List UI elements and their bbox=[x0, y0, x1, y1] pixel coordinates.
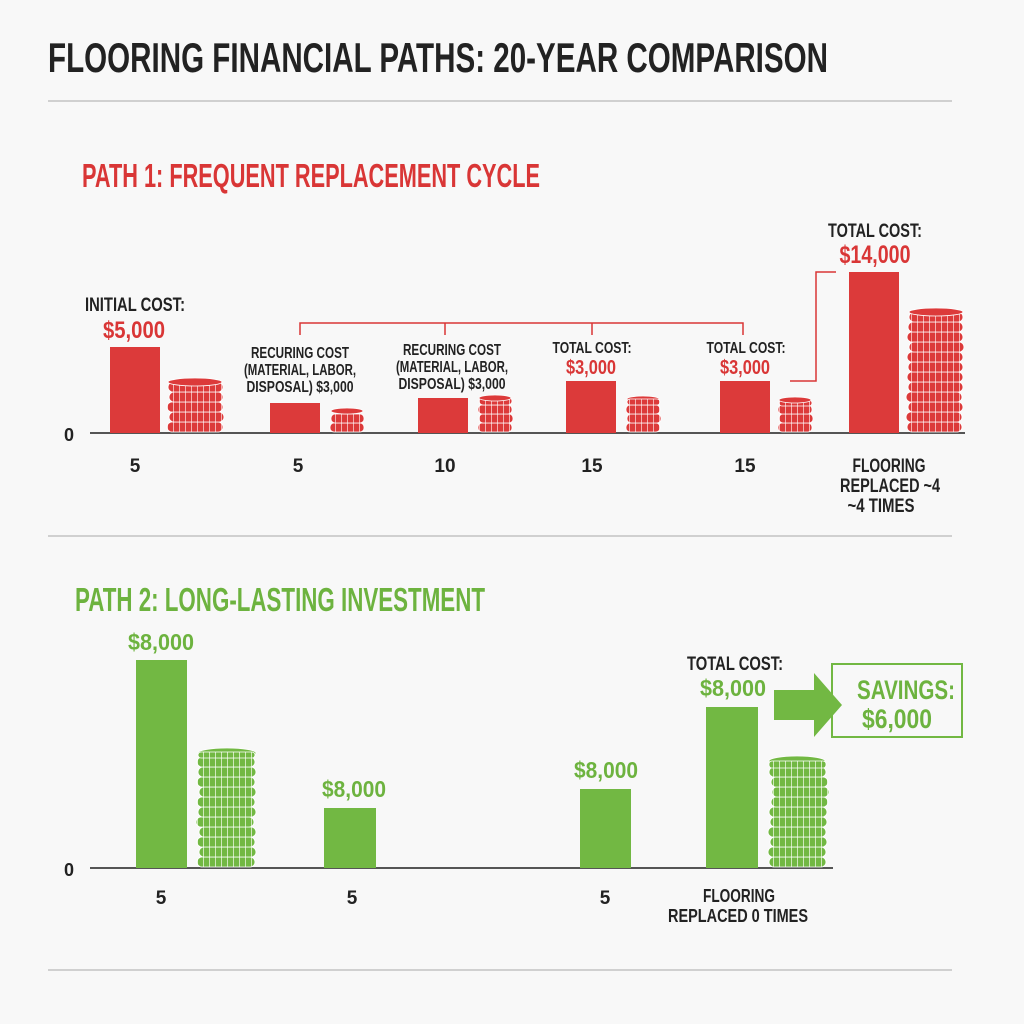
labels: INITIAL COST: bbox=[85, 295, 185, 316]
labels: $3,000 bbox=[566, 357, 616, 379]
savings callout: $6,000 bbox=[862, 704, 932, 734]
labels: $3,000 bbox=[720, 357, 770, 379]
labels: TOTAL COST: bbox=[687, 654, 783, 675]
labels: REPLACED 0 TIMES bbox=[668, 906, 808, 926]
labels: TOTAL COST: bbox=[828, 221, 922, 242]
labels: DISPOSAL) $3,000 bbox=[246, 379, 354, 396]
labels: 5 bbox=[347, 888, 358, 909]
labels: 15 bbox=[734, 456, 756, 477]
arrow bbox=[774, 673, 842, 737]
labels: (MATERIAL, LABOR, bbox=[396, 359, 508, 376]
bar: total bbox=[849, 272, 899, 433]
labels: 5 bbox=[130, 456, 141, 477]
labels: RECURING COST bbox=[403, 342, 501, 359]
bracket bbox=[300, 323, 743, 335]
labels: 5 bbox=[600, 888, 611, 909]
coins: green stacks bbox=[196, 748, 829, 867]
savings callout bbox=[832, 664, 962, 737]
bar: total bbox=[706, 707, 758, 868]
labels: FLOORING bbox=[852, 456, 926, 477]
labels: $5,000 bbox=[103, 317, 165, 344]
labels: REPLACED ~4 bbox=[840, 476, 940, 497]
labels bbox=[85, 221, 940, 517]
labels: $8,000 bbox=[128, 629, 194, 655]
labels: TOTAL COST: bbox=[552, 340, 632, 357]
labels: DISPOSAL) $3,000 bbox=[398, 376, 506, 393]
labels: $8,000 bbox=[574, 757, 638, 783]
bar: initial bbox=[136, 660, 187, 868]
labels: ~4 TIMES bbox=[848, 496, 914, 517]
chart: path 1: 0 bbox=[64, 425, 74, 445]
labels: $8,000 bbox=[700, 675, 766, 701]
labels: TOTAL COST: bbox=[706, 340, 786, 357]
labels: 10 bbox=[434, 456, 456, 477]
bar: 15 bbox=[566, 381, 616, 433]
bar: 2 bbox=[324, 808, 376, 868]
labels: $14,000 bbox=[840, 241, 910, 269]
labels: FLOORING bbox=[703, 886, 775, 906]
labels: 15 bbox=[581, 456, 603, 477]
heading: path 2: PATH 2: LONG-LASTING INVESTMENT bbox=[75, 581, 485, 618]
bar: initial bbox=[110, 347, 160, 433]
bar: 15b bbox=[720, 381, 770, 433]
savings callout: SAVINGS: bbox=[857, 675, 955, 705]
chart: path 2: 0 bbox=[64, 860, 74, 880]
labels: (MATERIAL, LABOR, bbox=[244, 362, 356, 379]
labels: 5 bbox=[156, 888, 167, 909]
bar: recurring 5 bbox=[270, 403, 320, 433]
chart: path 1 bbox=[64, 221, 965, 517]
coins: red stacks bbox=[167, 308, 964, 432]
labels: $8,000 bbox=[322, 776, 386, 802]
labels: 5 bbox=[293, 456, 304, 477]
connector bbox=[790, 272, 836, 381]
labels bbox=[128, 629, 808, 926]
heading: path 1: PATH 1: FREQUENT REPLACEMENT CYCLE bbox=[82, 157, 540, 194]
labels: RECURING COST bbox=[251, 345, 349, 362]
chart: path 2 bbox=[64, 629, 962, 926]
bar: recurring 10 bbox=[418, 398, 468, 433]
bar: 3 bbox=[580, 789, 631, 868]
